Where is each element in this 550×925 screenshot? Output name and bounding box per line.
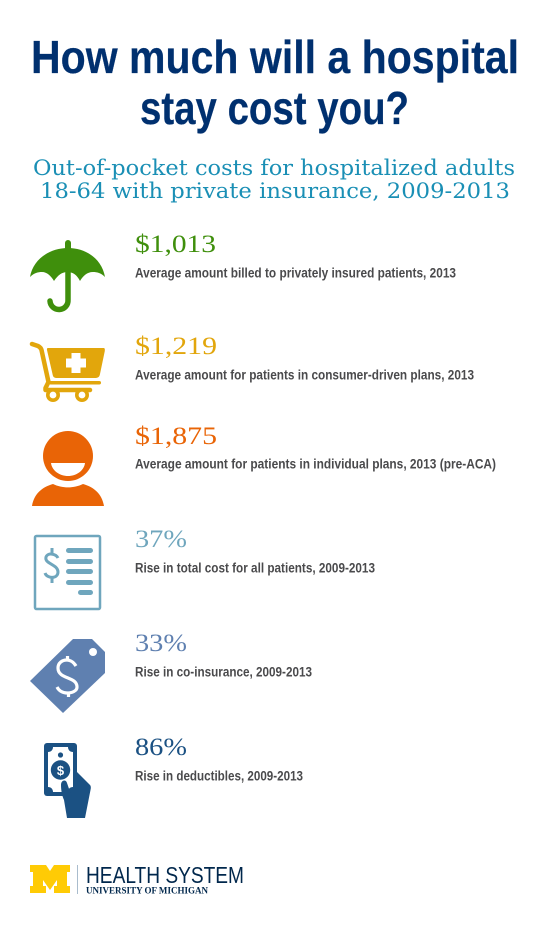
- figure: 86%: 86%: [135, 734, 187, 761]
- description: Rise in co-insurance, 2009-2013: [135, 664, 312, 680]
- icon: hand holding bill: [44, 743, 91, 818]
- subtitle: Out-of-pocket costs for hospitalized adults: [33, 156, 515, 181]
- figure: 37%: 37%: [135, 526, 187, 553]
- icon: shopping cart: [32, 344, 105, 400]
- row: cart: [32, 333, 474, 400]
- description: Rise in deductibles, 2009-2013: [135, 768, 303, 784]
- figure: $1,013: $1,013: [135, 231, 216, 258]
- subtitle: [33, 156, 515, 204]
- icon: hand holding bill: $: [57, 763, 65, 778]
- figure: $1,219: $1,219: [135, 333, 217, 360]
- icon: person: [32, 431, 104, 506]
- title: [31, 31, 519, 134]
- row: bill: [35, 526, 375, 609]
- figure: 33%: 33%: [135, 630, 187, 657]
- description: Average amount for patients in individual plans, 2013 (pre-ACA): [135, 456, 496, 472]
- logo: [30, 862, 244, 896]
- subtitle: 18-64 with private insurance, 2009-2013: [40, 179, 510, 204]
- logo: block M: [30, 865, 70, 893]
- logo: university line: UNIVERSITY OF MICHIGAN: [86, 886, 209, 896]
- title: stay cost you?: [140, 82, 409, 134]
- row: price tag: [30, 630, 312, 713]
- row: hand with money: [44, 734, 303, 818]
- description: Rise in total cost for all patients, 2009-2013: [135, 560, 375, 576]
- icon: price tag: [30, 639, 105, 713]
- description: Average amount for patients in consumer-driven plans, 2013: [135, 368, 474, 382]
- figure: $1,875: $1,875: [135, 423, 217, 450]
- icon: umbrella: [30, 240, 105, 310]
- row: umbrella: [30, 231, 456, 310]
- row: person: [32, 423, 496, 506]
- description: Average amount billed to privately insured patients, 2013: [135, 266, 456, 280]
- icon: bill: [35, 536, 100, 609]
- logo: wordmark: HEALTH SYSTEM: [86, 862, 244, 888]
